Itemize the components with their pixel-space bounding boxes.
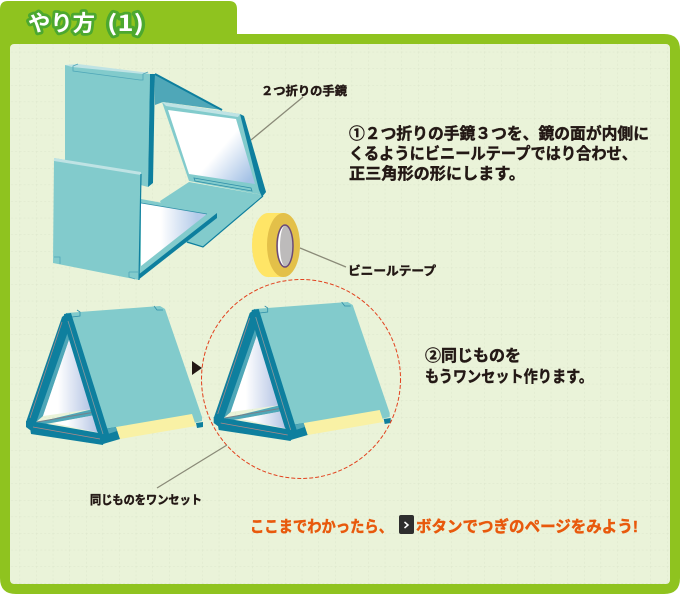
leader line: hand mirror	[251, 97, 303, 140]
label: tape: ビニールテープ	[348, 263, 436, 278]
text block: step 1	[349, 124, 649, 183]
text block: step 2: ②同じものを	[425, 347, 521, 365]
text block: step 1: くるようにビニールテープではり合わせ、	[349, 144, 637, 163]
text block: step 1: ①２つ折りの手鏡３つを、鏡の面が内側に	[349, 124, 649, 143]
illustration: second triangular prism	[214, 302, 391, 441]
bottom panel	[160, 182, 263, 247]
front mirror tray	[138, 199, 217, 280]
title: (1)	[107, 6, 144, 38]
text block: step 1: 正三角形の形にします。	[349, 164, 525, 183]
icon: vinyl tape roll	[252, 213, 300, 277]
icon: next button	[399, 515, 414, 534]
illustration: folding hand mirrors	[53, 64, 266, 280]
callout circle	[202, 280, 400, 478]
leader line: tape	[300, 248, 346, 267]
text block: step 2	[425, 347, 593, 386]
footer note: ここまでわかったら、	[250, 518, 393, 536]
front panel	[53, 158, 141, 280]
label: same set: 同じものをワンセット	[90, 493, 202, 507]
footer note	[250, 515, 638, 536]
back mirror panel	[65, 64, 155, 187]
text block: step 2: もうワンセット作ります。	[425, 368, 593, 386]
upper triangle interior	[155, 74, 222, 110]
illustration: first triangular prism	[26, 306, 203, 445]
footer note: ボタンでつぎのページをみよう!	[416, 517, 638, 536]
label: hand mirror: ２つ折りの手鏡	[261, 83, 347, 98]
title: やり方	[28, 11, 95, 36]
right mirror	[162, 102, 266, 197]
leader line: same set	[157, 445, 227, 488]
arrow	[192, 361, 202, 375]
title	[28, 6, 144, 38]
